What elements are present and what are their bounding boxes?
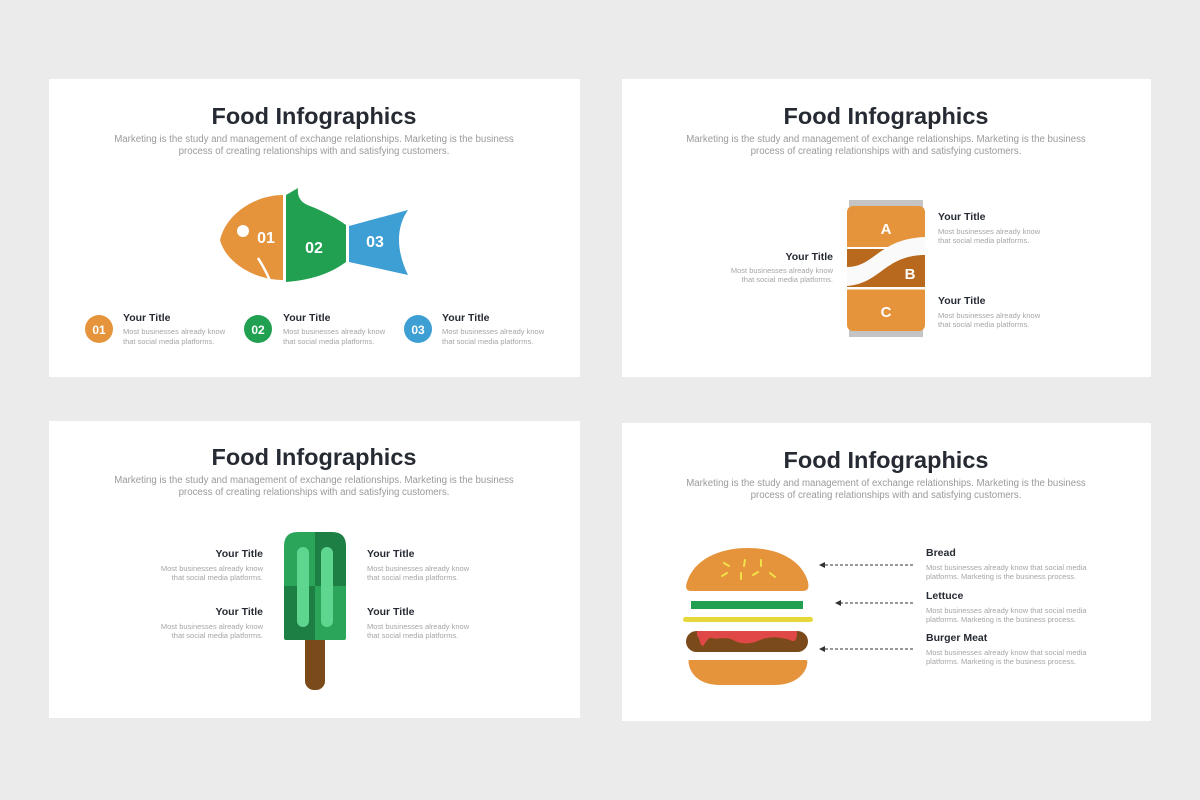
subtitle: process of creating relationships with and satisfying customers. (179, 487, 449, 498)
text: burger meat (926, 632, 1087, 666)
text: left top: that social media platforms. (172, 573, 263, 582)
text: left bottom: Most businesses already know (161, 622, 264, 631)
title: Food Infographics (784, 103, 988, 129)
text: burger meat: Burger Meat (926, 632, 988, 644)
panel: can (622, 79, 1151, 377)
text: left top (161, 548, 264, 582)
legend 03: 03 (411, 323, 425, 337)
subtitle: process of creating relationships with and satisfying customers. (751, 146, 1021, 157)
icon: fish: 01 (257, 230, 275, 247)
text: lettuce: platforms. Marketing is the business process. (926, 615, 1076, 624)
text: lettuce (926, 590, 1087, 624)
text: right bottom: that social media platforms. (367, 631, 458, 640)
text: C (938, 295, 1041, 329)
panel: popsicle (49, 421, 580, 718)
text: right top (367, 548, 470, 582)
legend 03: that social media platforms. (442, 337, 533, 346)
legend 02: Your Title (283, 312, 331, 324)
text: A: Your Title (938, 211, 986, 223)
text: left top: Your Title (216, 548, 263, 560)
text: C: Your Title (938, 295, 986, 307)
text: bread: Bread (926, 547, 956, 559)
text: right top: Most businesses already know (367, 564, 470, 573)
subtitle: process of creating relationships with and satisfying customers. (751, 490, 1021, 501)
text: left top: Most businesses already know (161, 564, 264, 573)
subtitle: Marketing is the study and management of exchange relationships. Marketing is the business (114, 475, 514, 486)
text: lettuce: Lettuce (926, 590, 964, 602)
text: right bottom (367, 606, 470, 640)
legend 03: Your Title (442, 312, 490, 324)
text: left bottom (161, 606, 264, 640)
icon: burger (683, 548, 813, 685)
legend 01: that social media platforms. (123, 337, 214, 346)
title: Food Infographics (212, 444, 416, 470)
legend 01 (85, 312, 226, 346)
title: Food Infographics (784, 447, 988, 473)
text: C: Most businesses already know (938, 311, 1041, 320)
legend 02: that social media platforms. (283, 337, 374, 346)
text: A: Most businesses already know (938, 227, 1041, 236)
text: B: Most businesses already know (731, 266, 834, 275)
text: A (938, 211, 1041, 245)
panel: fish (49, 79, 580, 377)
legend 01: Your Title (123, 312, 171, 324)
subtitle: Marketing is the study and management of exchange relationships. Marketing is the business (686, 478, 1086, 489)
arrow: lettuce (835, 600, 913, 606)
legend 02 (244, 312, 386, 346)
text: A: that social media platforms. (938, 236, 1029, 245)
icon: can: C (881, 304, 892, 321)
text: right bottom: Most businesses already know (367, 622, 470, 631)
legend 03 (404, 312, 545, 346)
text: B: Your Title (786, 251, 833, 263)
text: burger meat: Most businesses already know that social media (926, 648, 1087, 657)
icon: fish: 02 (305, 240, 323, 257)
text: right top: Your Title (367, 548, 415, 560)
icon: can: B (905, 266, 916, 283)
text: right top: that social media platforms. (367, 573, 458, 582)
legend 01: 01 (92, 323, 106, 337)
text: right bottom: Your Title (367, 606, 415, 618)
icon: fish: 03 (366, 234, 384, 251)
subtitle: Marketing is the study and management of exchange relationships. Marketing is the business (686, 134, 1086, 145)
text: bread (926, 547, 1087, 581)
title: Food Infographics (212, 103, 416, 129)
legend 02: Most businesses already know (283, 327, 386, 336)
text: bread: platforms. Marketing is the business process. (926, 572, 1076, 581)
text: C: that social media platforms. (938, 320, 1029, 329)
legend 02: 02 (251, 323, 265, 337)
text: burger meat: platforms. Marketing is the business process. (926, 657, 1076, 666)
text: B: that social media platforms. (742, 275, 833, 284)
subtitle: Marketing is the study and management of exchange relationships. Marketing is the business (114, 134, 514, 145)
text: bread: Most businesses already know that social media (926, 563, 1087, 572)
panel: burger (622, 423, 1151, 721)
subtitle: process of creating relationships with and satisfying customers. (179, 146, 449, 157)
text: left bottom: Your Title (216, 606, 263, 618)
icon: can: A (881, 221, 892, 238)
legend 03: Most businesses already know (442, 327, 545, 336)
icon: fish (220, 188, 408, 282)
arrow: bread (819, 562, 913, 568)
icon: popsicle (284, 532, 346, 690)
legend 01: Most businesses already know (123, 327, 226, 336)
text: left bottom: that social media platforms. (172, 631, 263, 640)
arrow: meat (819, 646, 913, 652)
text: lettuce: Most businesses already know that social media (926, 606, 1087, 615)
text: B (731, 251, 834, 284)
icon: can (847, 200, 925, 337)
